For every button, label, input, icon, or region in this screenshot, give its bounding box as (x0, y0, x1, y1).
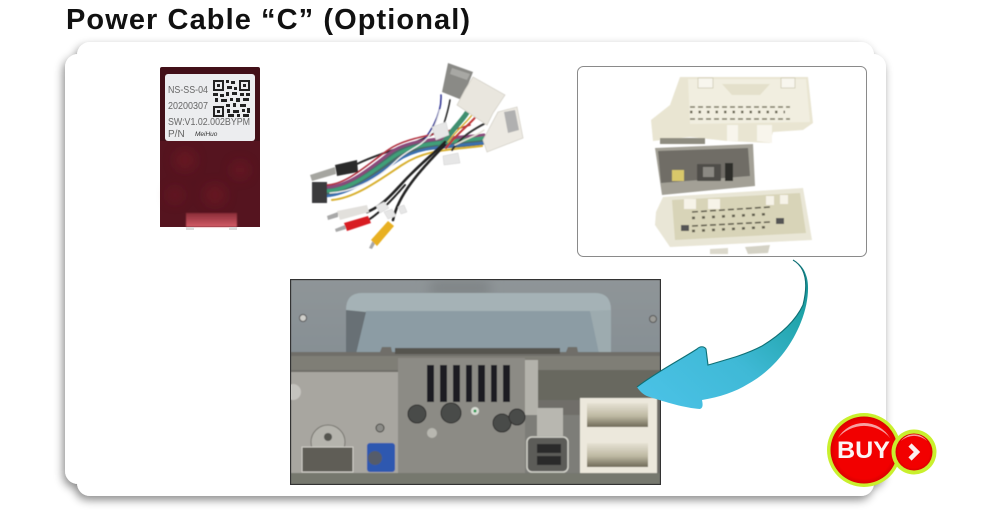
module label text: 20200307 (168, 100, 208, 112)
image: decoder module (160, 67, 260, 230)
button: BUY: BUY (837, 437, 890, 464)
screws (408, 403, 525, 432)
top white connector (651, 77, 813, 144)
yellow RCA plug (369, 221, 394, 249)
wire tags (376, 122, 460, 219)
dark socket (527, 437, 568, 472)
image: wiring harness (310, 63, 523, 249)
black connector left (310, 424, 346, 446)
bracket handle (346, 292, 612, 312)
module label text: MeiHuo (195, 131, 218, 138)
gray connector (442, 63, 473, 100)
button: BUY (827, 413, 936, 487)
red RCA plug (335, 216, 371, 232)
icon: QR code (213, 80, 250, 117)
module label text (168, 84, 250, 140)
blue connector (367, 443, 395, 472)
icon: chevron (910, 445, 917, 459)
image: head unit rear photo (285, 280, 660, 484)
bottom lip (291, 473, 660, 484)
white sockets (580, 398, 657, 474)
white RCA plug (327, 205, 369, 220)
panel: white card (65, 42, 886, 496)
module label text: SW:V1.02.002BYPM (168, 116, 250, 128)
white connector upper (457, 77, 505, 125)
title: Power Cable “C” (Optional) (66, 4, 470, 36)
antenna plug (310, 167, 336, 181)
vent slots (427, 365, 510, 402)
black block connector (312, 182, 327, 203)
white connector lower (483, 107, 523, 152)
metal gusset (537, 408, 563, 436)
panel: connector close-up frame (578, 66, 866, 256)
harness wires (325, 95, 487, 222)
middle gray connector (655, 144, 755, 195)
metal chassis (291, 347, 660, 480)
module label text: P/N (168, 129, 185, 140)
module label text: NS-SS-04 (168, 84, 208, 96)
mounting holes (300, 314, 306, 322)
arrow: teal curved arrow (637, 260, 808, 409)
bottom white connector (655, 188, 812, 254)
